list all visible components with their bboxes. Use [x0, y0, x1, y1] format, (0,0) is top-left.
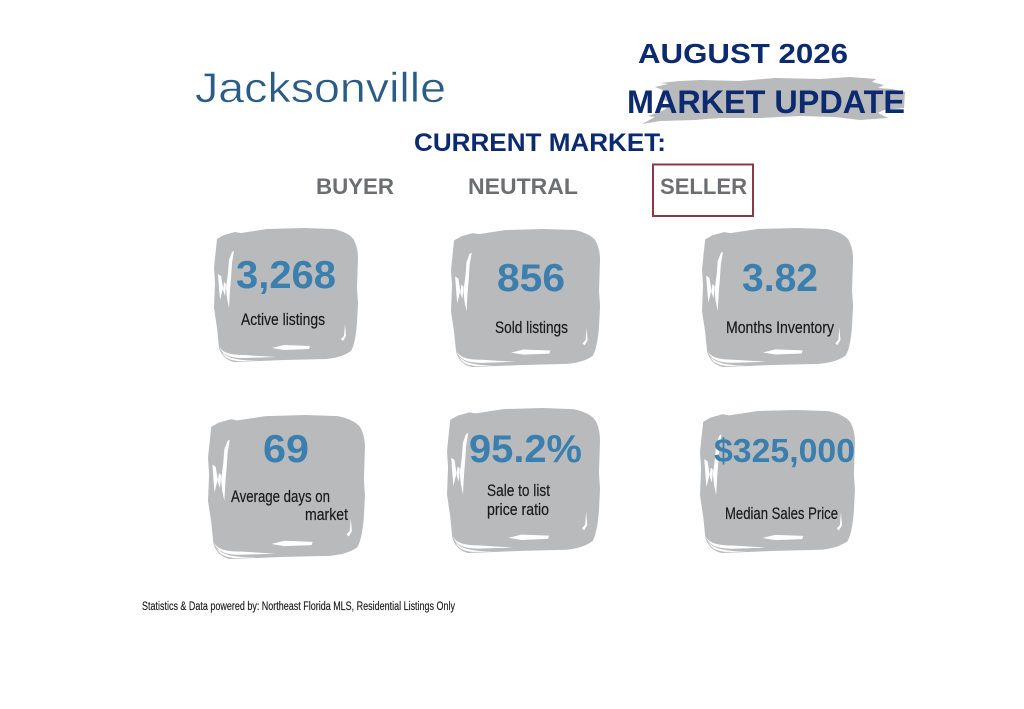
- metric label: Active listings: [241, 310, 325, 329]
- panel: median sales price: [700, 410, 855, 553]
- metric label: Sale to list: [487, 481, 550, 500]
- brush stroke behind heading: [642, 77, 905, 124]
- metric label: [487, 481, 550, 519]
- heading: current market: CURRENT MARKET:: [414, 129, 666, 157]
- metric label: [231, 487, 348, 524]
- source footnote: Statistics & Data powered by: Northeast Florida MLS, Residential Listings Only: [142, 601, 455, 613]
- metric label: market: [305, 505, 348, 524]
- metric label: Sold listings: [495, 318, 568, 337]
- panel: average days on market: [208, 415, 365, 559]
- metric label: Average days on: [231, 487, 330, 506]
- panel: sold listings: [451, 229, 600, 367]
- metric value: 95.2%: [469, 428, 582, 471]
- option: neutral: NEUTRAL: [468, 174, 578, 199]
- metric label: Median Sales Price: [725, 504, 838, 523]
- metric label: price ratio: [487, 500, 549, 519]
- metric value: 856: [497, 257, 565, 300]
- metric value: 69: [263, 428, 309, 471]
- metric value: 3,268: [236, 254, 336, 297]
- metric value: $325,000: [714, 432, 855, 469]
- panel: active listings: [214, 228, 358, 362]
- location title: Jacksonville: [195, 64, 446, 111]
- option: seller (selected): [653, 164, 753, 216]
- metric value: 3.82: [742, 257, 818, 300]
- option: buyer: BUYER: [316, 174, 394, 199]
- panel: months inventory: [702, 228, 853, 367]
- metric label: Months Inventory: [726, 318, 834, 337]
- option: seller (selected): SELLER: [660, 174, 747, 199]
- heading: market update: MARKET UPDATE: [627, 84, 905, 120]
- panel: sale to list price ratio: [447, 408, 600, 553]
- heading: date: AUGUST 2026: [638, 38, 848, 69]
